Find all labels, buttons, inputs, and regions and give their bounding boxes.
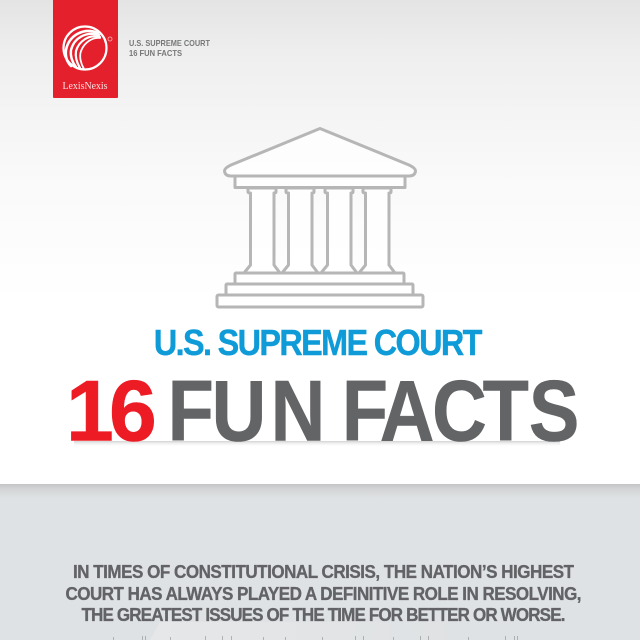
entablature [235,176,405,188]
panel: top background [0,0,640,484]
title: 16 Fun Facts: FUNFACTS [168,364,579,460]
column 4 [359,188,395,273]
logo: LexisNexis red badge [53,0,118,98]
intro heading text [66,561,582,625]
clipped body text line [113,636,518,640]
icon: courthouse [217,128,423,307]
column 3 [321,188,357,273]
pediment [224,128,416,176]
step 1 [235,273,404,284]
title shadow [74,441,560,447]
step 2 [226,284,413,295]
intro heading text: THE GREATEST ISSUES OF THE TIME FOR BETTER OR WORSE. [82,604,565,625]
header caption: U.S. SUPREME COURT [129,38,211,48]
column 2 [282,188,318,273]
column 1 [244,188,280,273]
header caption [129,38,211,58]
header caption: 16 FUN FACTS [129,48,182,58]
intro heading text: IN TIMES OF CONSTITUTIONAL CRISIS, THE NATION’S HIGHEST [73,561,574,582]
step 3 [217,295,423,307]
panel: lower background [0,484,640,640]
intro heading text: COURT HAS ALWAYS PLAYED A DEFINITIVE ROLE IN RESOLVING, [66,583,582,604]
logo wordmark: LexisNexis [62,81,108,92]
title: 16 Fun Facts: 16 [66,364,157,460]
title: U.S. Supreme Court: U.S. SUPREME COURT [154,323,482,363]
